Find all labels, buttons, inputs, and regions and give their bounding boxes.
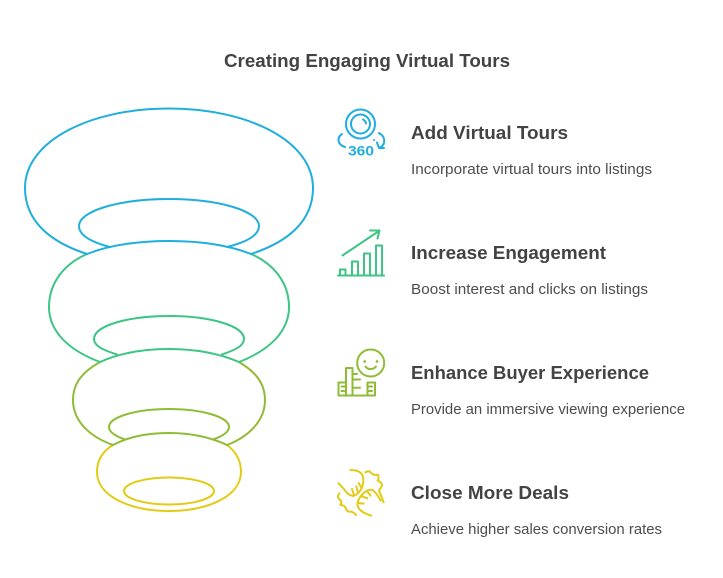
funnel stage 3: olive bbox=[73, 362, 265, 445]
description: Achieve higher sales conversion rates bbox=[411, 522, 662, 538]
icon: 360 camera bbox=[338, 110, 384, 158]
icon: 360 camera: 360 bbox=[348, 142, 374, 158]
description: Incorporate virtual tours into listings bbox=[411, 162, 652, 178]
item: enhance buyer experience bbox=[338, 350, 685, 418]
funnel stage 4: yellow bbox=[97, 445, 241, 511]
description: Boost interest and clicks on listings bbox=[411, 282, 648, 298]
item: add virtual tours bbox=[338, 110, 652, 178]
heading: Add Virtual Tours bbox=[411, 122, 568, 143]
funnel diagram bbox=[25, 108, 313, 511]
heading: Close More Deals bbox=[411, 482, 569, 503]
heading: Increase Engagement bbox=[411, 242, 606, 263]
title: Creating Engaging Virtual Tours bbox=[224, 51, 510, 71]
icon: building and smiley bbox=[338, 350, 384, 396]
heading: Enhance Buyer Experience bbox=[411, 362, 649, 383]
funnel stage 1: blue bbox=[25, 108, 313, 254]
icon: handshake bbox=[338, 470, 384, 516]
funnel stage 2: green bbox=[49, 254, 289, 362]
item: increase engagement bbox=[338, 230, 648, 298]
description: Provide an immersive viewing experience bbox=[411, 402, 685, 418]
item: close more deals bbox=[338, 470, 662, 538]
icon: growth chart bbox=[338, 230, 384, 276]
